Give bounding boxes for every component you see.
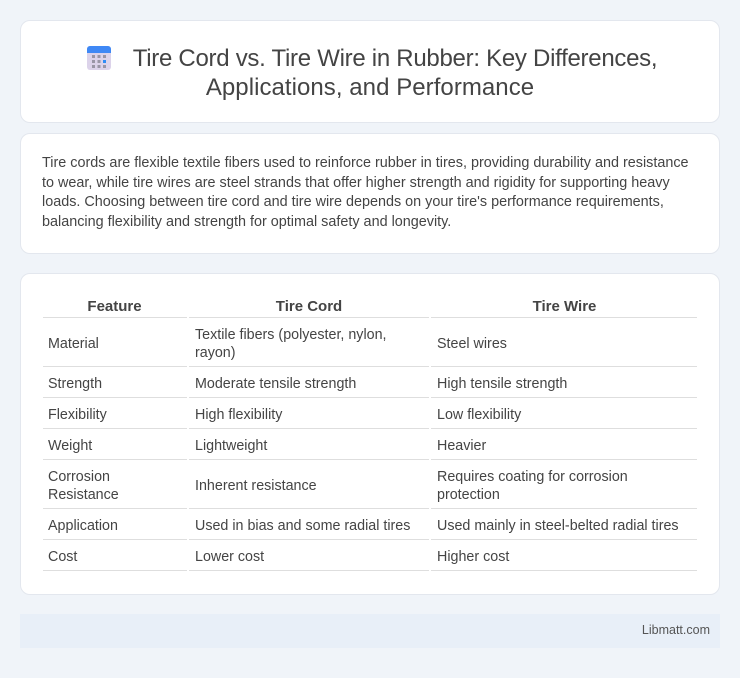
- title: Tire Cord vs. Tire Wire in Rubber: Key Differences,: [133, 45, 657, 72]
- intro text: balancing flexibility and strength for optimal safety and longevity.: [42, 214, 451, 230]
- table: Material: [48, 336, 99, 352]
- intro text: [42, 155, 689, 230]
- panel: intro card: [20, 133, 720, 254]
- intro text: Tire cords are flexible textile fibers used to reinforce rubber in tires, providing durability and resistance: [42, 155, 689, 171]
- table: Corrosion: [48, 469, 110, 485]
- table: Heavier: [437, 438, 486, 454]
- table: Steel wires: [437, 336, 507, 352]
- table: Inherent resistance: [195, 478, 317, 494]
- table: Resistance: [48, 487, 119, 503]
- table: Flexibility: [48, 407, 107, 423]
- table: Lower cost: [195, 549, 264, 565]
- table: Requires coating for corrosion: [437, 469, 628, 485]
- panel: table card: [20, 273, 720, 595]
- icon: calendar: [87, 46, 111, 70]
- table: Low flexibility: [437, 407, 521, 423]
- panel: title card: [20, 20, 720, 123]
- title line 2: Applications, and Performance: [206, 74, 534, 101]
- table: Application: [48, 518, 118, 534]
- table: Lightweight: [195, 438, 267, 454]
- intro text: loads. Choosing between tire cord and tire wire depends on your tire's performance requirements,: [42, 194, 664, 210]
- table: Textile fibers (polyester, nylon,: [195, 327, 387, 343]
- footer bar: [20, 614, 720, 648]
- table: Strength: [48, 376, 102, 392]
- table: Used mainly in steel-belted radial tires: [437, 518, 679, 534]
- table: Higher cost: [437, 549, 509, 565]
- table: High tensile strength: [437, 376, 567, 392]
- table: Weight: [48, 438, 92, 454]
- table: Tire Wire: [533, 298, 596, 315]
- table: Tire Cord: [276, 298, 342, 315]
- table: rayon): [195, 345, 236, 361]
- footer text: Libmatt.com: [642, 623, 710, 637]
- table: protection: [437, 487, 500, 503]
- intro text: to wear, while tire wires are steel strands that offer higher strength and rigidity for supporting heavy: [42, 174, 670, 190]
- table: Cost: [48, 549, 77, 565]
- table: Used in bias and some radial tires: [195, 518, 410, 534]
- table: Moderate tensile strength: [195, 376, 356, 392]
- table: Feature: [87, 298, 142, 315]
- table: High flexibility: [195, 407, 282, 423]
